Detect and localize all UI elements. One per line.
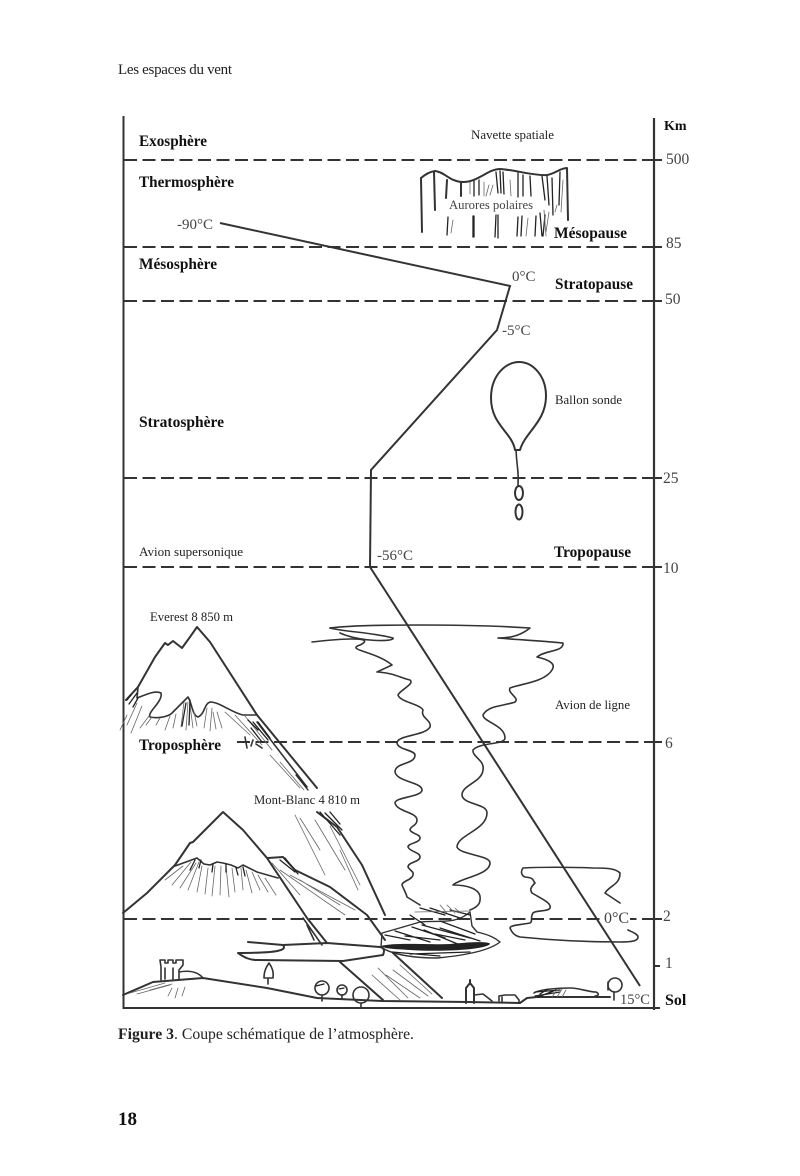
temperature curve: 0°C: [604, 910, 629, 927]
page number: 18: [118, 1109, 137, 1130]
altitude axis: 1: [665, 955, 673, 972]
object labels: Avion de ligne: [555, 697, 630, 712]
altitude axis: [654, 118, 690, 1010]
Mont-Blanc: [123, 812, 385, 945]
left and bottom frame: [124, 116, 660, 1008]
cumulonimbus: [312, 625, 563, 958]
temperature curve: 15°C: [620, 992, 650, 1008]
temperature curve: 0°C: [512, 269, 536, 285]
altitude axis: Sol: [665, 992, 687, 1009]
layer names: Exosphère: [139, 133, 207, 150]
altitude axis: 500: [666, 151, 690, 168]
chart: atmosphere cross-section: [120, 116, 690, 1010]
layer names: Mésopause: [554, 225, 627, 242]
object labels: Mont-Blanc 4 810 m: [254, 792, 360, 807]
altitude axis: 10: [663, 560, 679, 577]
object labels: [139, 127, 630, 807]
object labels: Ballon sonde: [555, 392, 622, 407]
icon: round trees: [315, 981, 369, 1007]
altitude axis: 25: [663, 470, 679, 487]
flat cloud: [238, 942, 384, 961]
lower foothill slopes: [340, 953, 442, 1000]
layer names: Stratosphère: [139, 414, 224, 431]
temperature curve: -5°C: [502, 323, 530, 339]
temperature curve: -90°C: [177, 217, 213, 233]
layer names: [139, 133, 633, 754]
running header: Les espaces du vent: [118, 62, 233, 78]
figure caption: Figure 3. Coupe schématique de l’atmosphère.: [118, 1026, 414, 1043]
object labels: Navette spatiale: [471, 127, 554, 142]
object labels: Avion supersonique: [139, 544, 243, 559]
polar aurora: [421, 168, 568, 238]
layer names: Tropopause: [554, 544, 631, 561]
hill shading: [130, 983, 185, 998]
icon: isolated tree: [608, 978, 622, 1000]
temperature curve: -56°C: [377, 548, 413, 564]
altitude axis: 50: [665, 291, 681, 308]
Everest: [120, 627, 317, 790]
layer names: Thermosphère: [139, 174, 234, 191]
icon: cypress tree: [264, 963, 273, 984]
weather balloon: [491, 362, 546, 520]
polar aurora: Aurores polaires: [449, 197, 533, 212]
altitude axis: 6: [665, 735, 673, 752]
icon: church and village: [466, 980, 519, 1003]
icon: bushy hedge: [534, 988, 598, 997]
altitude axis: 2: [663, 908, 671, 925]
layer names: Mésosphère: [139, 256, 217, 273]
low stratocumulus cloud: [510, 867, 638, 942]
altitude axis: 85: [666, 235, 682, 252]
object labels: Everest 8 850 m: [150, 609, 233, 624]
temperature curve: [177, 217, 650, 1008]
layer names: Stratopause: [555, 276, 633, 293]
icon: castle: [160, 960, 203, 980]
layer names: Troposphère: [139, 737, 221, 754]
layer boundaries (dashed): [124, 160, 654, 919]
ground line: [123, 978, 610, 1003]
altitude axis: Km: [664, 119, 687, 134]
